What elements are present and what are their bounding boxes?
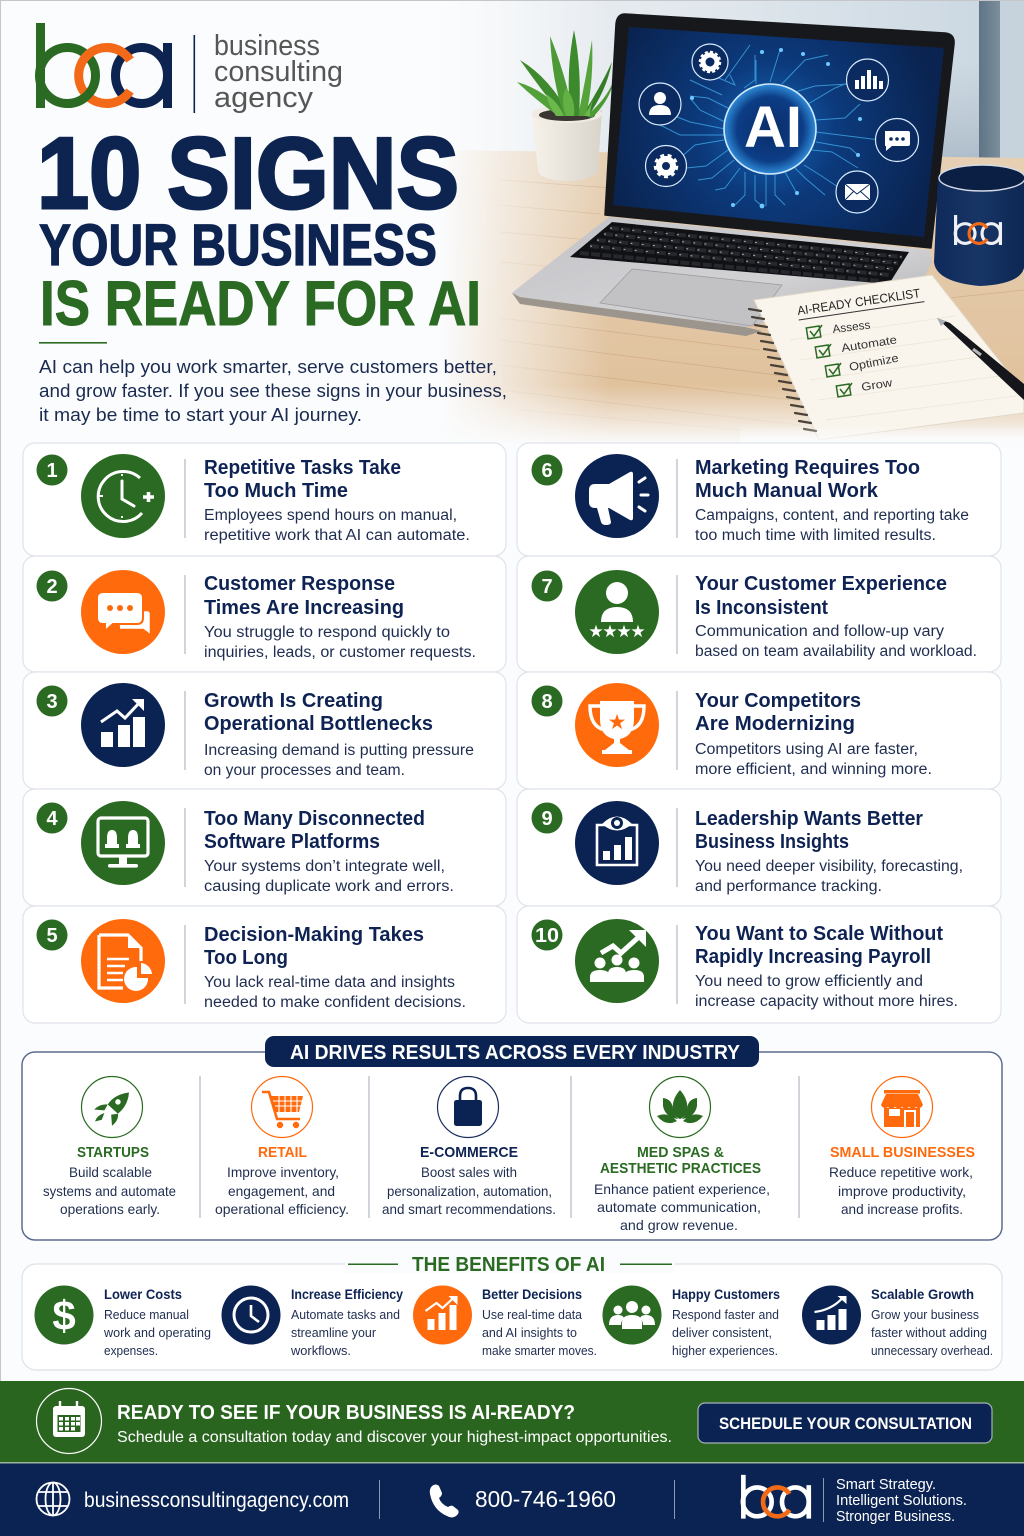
icon: growth chart	[81, 683, 165, 767]
spiral binding	[749, 309, 816, 431]
icon: trophy: ★	[608, 711, 626, 734]
badge 1: 1	[46, 460, 58, 482]
logo wordmark: business	[214, 30, 320, 62]
description: Reduce manual	[104, 1307, 189, 1322]
icon: shopping bag	[438, 1076, 498, 1138]
icon: lotus	[650, 1076, 710, 1138]
panel: industries	[22, 1036, 1002, 1240]
notebook: AI-ready checklist: AI-READY CHECKLIST	[796, 286, 921, 318]
title: IS READY FOR AI	[40, 269, 481, 339]
description	[382, 1164, 556, 1217]
heading: Growth Is Creating	[204, 689, 383, 712]
description: streamline your	[291, 1325, 377, 1340]
heading: Business Insights	[695, 830, 849, 853]
heading	[695, 572, 947, 619]
card 3	[23, 672, 506, 789]
description	[695, 507, 969, 544]
logo mark	[36, 23, 172, 108]
card 1	[23, 443, 506, 556]
industry: small businesses: SMALL BUSINESSES	[830, 1144, 975, 1161]
description: Competitors using AI are faster,	[695, 741, 918, 758]
icon: dollar: $	[52, 1292, 76, 1339]
card 10	[517, 906, 1001, 1023]
icon: storefront	[872, 1076, 932, 1138]
badge 2: 2	[46, 576, 58, 598]
logo wordmark: consulting	[214, 56, 343, 88]
tagline: Smart Strategy.	[836, 1476, 936, 1493]
panel: benefits	[22, 1254, 1002, 1370]
description: You need deeper visibility, forecasting,	[695, 858, 963, 875]
button: SCHEDULE YOUR CONSULTATION	[719, 1415, 972, 1433]
description: Boost sales with	[421, 1164, 517, 1180]
label: MED SPAS &	[637, 1144, 724, 1161]
badge 4	[36, 802, 68, 834]
description: operations early.	[60, 1201, 160, 1217]
description	[103, 1307, 211, 1358]
icon: globe	[36, 1482, 70, 1516]
description: higher experiences.	[672, 1343, 778, 1358]
description: Campaigns, content, and reporting take	[695, 507, 969, 524]
industry: startups: STARTUPS	[77, 1144, 149, 1161]
title	[37, 118, 481, 339]
logo wordmark	[214, 30, 343, 114]
description	[204, 624, 476, 661]
badge 3: 3	[46, 691, 58, 713]
icon: chat bubbles	[81, 570, 165, 654]
description	[672, 1307, 779, 1358]
description: deliver consistent,	[672, 1325, 772, 1340]
heading: Customer Response	[204, 572, 395, 595]
tagline: Stronger Business.	[836, 1508, 955, 1525]
heading: Too Long	[204, 946, 288, 969]
heading: Much Manual Work	[695, 479, 879, 502]
description: Your systems don’t integrate well,	[204, 858, 445, 875]
heading: Repetitive Tasks Take	[204, 456, 401, 479]
description: increase capacity without more hires.	[695, 993, 958, 1010]
benefit: scalable growth: Scalable Growth	[871, 1286, 974, 1302]
description	[290, 1307, 400, 1358]
laptop	[512, 14, 954, 336]
heading: Are Modernizing	[695, 712, 855, 735]
description: engagement, and	[228, 1183, 335, 1199]
heading: READY TO SEE IF YOUR BUSINESS IS AI-READY?	[117, 1401, 575, 1424]
benefit: scalable growth	[802, 1286, 993, 1358]
description: and performance tracking.	[695, 878, 882, 895]
industry: retail	[215, 1076, 349, 1217]
description: and increase profits.	[841, 1201, 963, 1217]
intro paragraph	[39, 356, 507, 425]
pen	[937, 318, 1024, 400]
icon: customer with stars	[575, 570, 659, 654]
badge 5: 5	[46, 925, 58, 947]
heading: Too Much Time	[204, 479, 348, 502]
heading: Times Are Increasing	[204, 596, 404, 619]
circuit lines	[648, 45, 880, 206]
description: and AI insights to	[482, 1325, 577, 1340]
description: unnecessary overhead.	[871, 1343, 993, 1358]
description	[204, 742, 474, 779]
heading: Your Competitors	[695, 689, 861, 712]
badge 8	[532, 686, 562, 716]
industry: e-commerce	[382, 1076, 556, 1217]
benefit: increase efficiency	[222, 1286, 403, 1358]
badge 2	[36, 570, 68, 602]
notebook: AI-ready checklist: Grow	[861, 377, 894, 394]
description: workflows.	[290, 1343, 351, 1358]
heading	[204, 923, 424, 969]
benefit: increase efficiency: Increase Efficiency	[291, 1286, 403, 1302]
heading: Your Customer Experience	[695, 572, 947, 595]
card 7	[517, 556, 1001, 672]
icon: shopping cart	[252, 1076, 312, 1138]
description	[829, 1164, 973, 1217]
icon: customer with stars: ★	[630, 622, 646, 641]
description: Improve inventory,	[227, 1164, 339, 1180]
phone number: 800-746-1960	[475, 1486, 616, 1512]
description	[43, 1164, 176, 1217]
screen icons	[639, 44, 918, 213]
description	[695, 858, 963, 895]
badge 5	[36, 920, 68, 950]
description: Grow your business	[871, 1307, 979, 1322]
badge 1	[36, 454, 68, 486]
description	[204, 974, 466, 1011]
description	[482, 1307, 597, 1358]
description	[695, 973, 958, 1010]
card 4	[23, 789, 506, 906]
industry: small businesses	[829, 1076, 975, 1217]
description	[204, 858, 454, 895]
button	[698, 1403, 992, 1443]
description: You lack real-time data and insights	[204, 974, 455, 991]
badge 9: 9	[541, 808, 553, 830]
icon: insights eye chart	[575, 801, 659, 885]
heading	[204, 807, 425, 853]
description: and grow revenue.	[620, 1217, 738, 1233]
subtext: Schedule a consultation today and discover your highest-impact opportunities.	[117, 1429, 672, 1446]
heading	[204, 456, 401, 502]
heading: Is Inconsistent	[695, 596, 828, 619]
icon: clock	[222, 1286, 280, 1344]
label: AESTHETIC PRACTICES	[600, 1160, 761, 1177]
description: Reduce repetitive work,	[829, 1164, 973, 1180]
title: YOUR BUSINESS	[39, 213, 437, 278]
card 2	[23, 556, 506, 672]
description: based on team availability and workload.	[695, 643, 977, 660]
description: causing duplicate work and errors.	[204, 878, 454, 895]
icon: growth arrow	[802, 1286, 861, 1344]
description	[594, 1181, 770, 1233]
heading	[695, 807, 923, 853]
description: make smarter moves.	[482, 1343, 597, 1358]
description: Communication and follow-up vary	[695, 623, 944, 640]
label	[600, 1144, 761, 1177]
description	[204, 507, 470, 544]
description: systems and automate	[43, 1183, 176, 1199]
notebook: AI-ready checklist: Automate	[841, 334, 898, 355]
icon: dollar	[34, 1286, 94, 1344]
description: operational efficiency.	[215, 1201, 349, 1217]
heading: THE BENEFITS OF AI	[412, 1254, 605, 1276]
logo wordmark: agency	[214, 82, 314, 114]
description: needed to make confident decisions.	[204, 994, 466, 1011]
heading	[204, 689, 433, 735]
heading: Rapidly Increasing Payroll	[695, 945, 931, 968]
description: Respond faster and	[672, 1307, 779, 1322]
heading: Leadership Wants Better	[695, 807, 923, 830]
description	[215, 1164, 349, 1217]
AI core circle	[724, 84, 816, 174]
icon: customer with stars: ★	[588, 622, 604, 641]
industry: e-commerce: E-COMMERCE	[420, 1144, 518, 1161]
card 8	[517, 672, 1001, 789]
icon: rocket	[82, 1076, 142, 1138]
footer logo	[741, 1475, 811, 1519]
badge 9	[532, 802, 562, 834]
badge 4: 4	[46, 808, 58, 830]
description: expenses.	[104, 1343, 158, 1358]
icon: team growth	[575, 919, 659, 1003]
heading: You Want to Scale Without	[695, 922, 943, 945]
logo: bca business consulting agency	[36, 23, 343, 114]
heading pill	[265, 1036, 759, 1067]
icon: monitor	[81, 801, 165, 885]
card 6	[517, 443, 1001, 556]
intro paragraph: and grow faster. If you see these signs in your business,	[39, 380, 507, 401]
description: and smart recommendations.	[382, 1201, 556, 1217]
notebook: AI-ready checklist	[749, 275, 1024, 440]
description: Enhance patient experience,	[594, 1181, 770, 1197]
description	[695, 741, 932, 778]
benefit: better decisions: Better Decisions	[482, 1286, 582, 1302]
benefit: happy customers: Happy Customers	[672, 1286, 780, 1302]
description: You struggle to respond quickly to	[204, 624, 450, 641]
badge 6: 6	[541, 460, 553, 482]
icon: growth chart	[413, 1286, 472, 1344]
description: improve productivity,	[838, 1183, 966, 1199]
badge 10	[532, 920, 562, 950]
description: on your processes and team.	[204, 762, 405, 779]
description: You need to grow efficiently and	[695, 973, 923, 990]
icon: phone	[430, 1484, 459, 1518]
icon: customer with stars: ★	[616, 622, 632, 641]
plant	[517, 30, 614, 181]
benefit: better decisions	[413, 1286, 597, 1358]
card 5	[23, 906, 506, 1023]
heading: Too Many Disconnected	[204, 807, 425, 830]
tagline	[836, 1476, 967, 1525]
icon: document with pie chart	[81, 919, 165, 1003]
title: 10 SIGNS	[37, 118, 459, 230]
industry: retail: RETAIL	[258, 1144, 307, 1161]
card 9	[517, 789, 1001, 906]
badge 6	[532, 454, 562, 486]
icon: trophy	[575, 683, 659, 767]
heading: Decision-Making Takes	[204, 923, 424, 946]
icon: people	[602, 1286, 662, 1344]
heading	[695, 922, 943, 968]
description: Build scalable	[69, 1164, 152, 1180]
description: work and operating	[103, 1325, 211, 1340]
icon: megaphone	[575, 454, 659, 538]
badge 8: 8	[541, 691, 553, 713]
heading	[204, 572, 404, 619]
heading	[695, 689, 861, 735]
description: faster without adding	[871, 1325, 987, 1340]
badge 10: 10	[535, 925, 559, 947]
industry: startups	[43, 1076, 176, 1217]
coffee mug	[934, 165, 1024, 286]
benefit: lower costs	[34, 1286, 211, 1358]
heading: Software Platforms	[204, 830, 380, 853]
benefit: happy customers	[602, 1286, 780, 1358]
heading: Operational Bottlenecks	[204, 712, 433, 735]
description: too much time with limited results.	[695, 527, 936, 544]
description: personalization, automation,	[387, 1183, 552, 1199]
badge 7: 7	[541, 576, 553, 598]
notebook: AI-ready checklist: Optimize	[848, 353, 900, 374]
hero photo: laptop on desk	[440, 0, 1024, 445]
call to action band	[0, 1381, 1024, 1464]
AI core circle: AI	[744, 95, 802, 160]
description: Employees spend hours on manual,	[204, 507, 457, 524]
description: more efficient, and winning more.	[695, 761, 932, 778]
description: Increasing demand is putting pressure	[204, 742, 474, 759]
heading pill: AI DRIVES RESULTS ACROSS EVERY INDUSTRY	[290, 1042, 741, 1064]
icon: customer with stars: ★	[602, 622, 618, 641]
description: inquiries, leads, or customer requests.	[204, 644, 476, 661]
description: automate communication,	[597, 1199, 761, 1215]
intro paragraph: it may be time to start your AI journey.	[39, 404, 362, 425]
badge 3	[36, 686, 68, 716]
description: Use real-time data	[482, 1307, 583, 1322]
tagline: Intelligent Solutions.	[836, 1492, 967, 1509]
heading	[695, 456, 920, 502]
description	[695, 623, 977, 660]
intro paragraph: AI can help you work smarter, serve customers better,	[39, 356, 497, 377]
footer	[0, 1464, 1024, 1536]
website: businessconsultingagency.com	[84, 1489, 349, 1512]
description	[871, 1307, 993, 1358]
icon: calendar	[36, 1388, 102, 1454]
heading: Marketing Requires Too	[695, 456, 920, 479]
notebook: AI-ready checklist: Assess	[832, 319, 871, 336]
industry: med spas	[594, 1076, 770, 1233]
benefit: lower costs: Lower Costs	[104, 1286, 182, 1302]
badge 7	[532, 570, 562, 602]
description: Automate tasks and	[291, 1307, 400, 1322]
description: repetitive work that AI can automate.	[204, 527, 470, 544]
icon: clock	[81, 454, 165, 538]
